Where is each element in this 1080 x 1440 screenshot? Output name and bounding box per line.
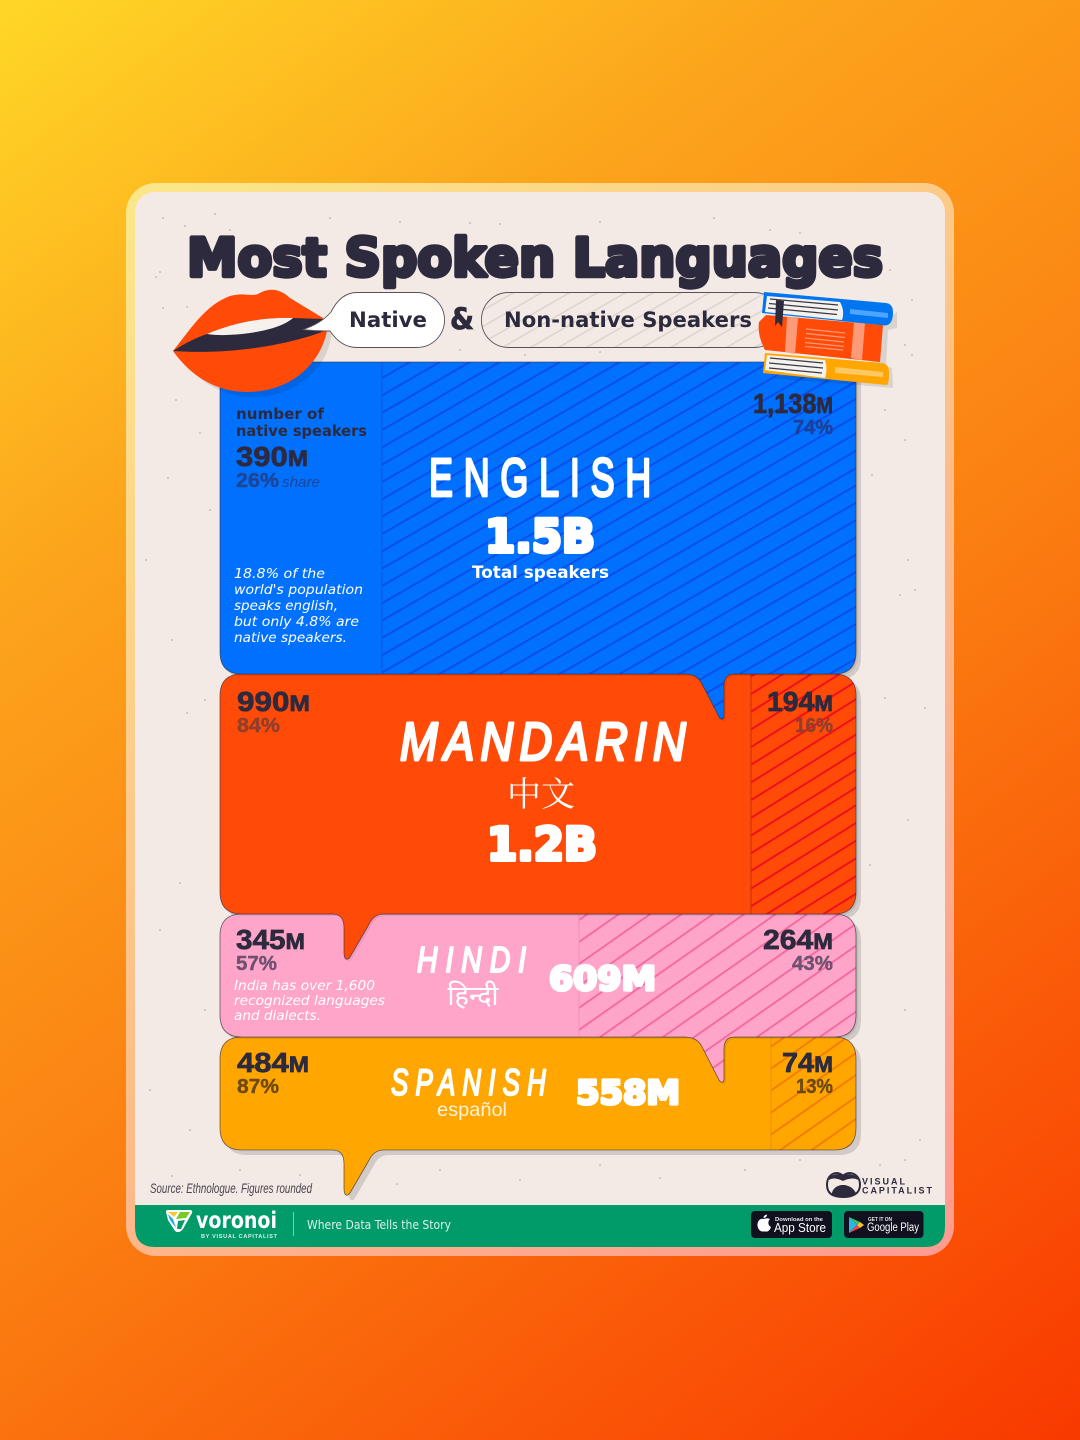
language name: ENGLISH (429, 448, 662, 508)
native speakers value: 390M (236, 441, 308, 472)
native speakers value: 345M (236, 924, 305, 955)
legend: non-native pill (482, 292, 782, 348)
legend: native pill: Native (349, 308, 427, 332)
note: world population: but only 4.8% are (234, 614, 359, 630)
wordmark: voronoi (196, 1208, 277, 1234)
title: Most Spoken Languages (187, 228, 883, 289)
tagline: BY VISUAL CAPITALIST (201, 1234, 278, 1240)
total speakers: 1.2B (487, 818, 597, 871)
footer slogan: Where Data Tells the Story (307, 1218, 451, 1232)
icon: lips (173, 290, 332, 397)
orange book (759, 315, 883, 362)
note: world population: world's population (234, 582, 363, 598)
note: world population (234, 566, 363, 646)
legend note: number of native speakers: number of (236, 405, 324, 423)
native share (236, 470, 320, 492)
card frame (126, 183, 954, 1256)
card panel (135, 192, 945, 1247)
legend note: number of native speakers (236, 405, 367, 440)
non-native value: 194M (767, 686, 833, 717)
native name: 中文 (507, 767, 575, 816)
badge: app store (751, 1211, 832, 1238)
native share: 26% (236, 470, 279, 492)
non-native share: 74% (793, 417, 833, 439)
language name: HINDI (417, 939, 534, 980)
native name: हिन्दी (447, 981, 500, 1011)
note: world population: 18.8% of the (234, 566, 325, 582)
note: india: and dialects. (234, 1008, 321, 1024)
icon: play triangle (849, 1217, 864, 1233)
non-native value: 1,138M (753, 388, 833, 419)
legend: ampersand: & (450, 302, 474, 336)
panel: mandarin (220, 674, 858, 961)
non-native value: 74M (782, 1047, 833, 1078)
native share: 84% (237, 715, 280, 737)
badge: app store: Download on the (775, 1217, 823, 1223)
non-native share: 13% (796, 1076, 833, 1098)
total speakers: 1.5B (485, 510, 595, 563)
icon: stack of books (759, 292, 897, 388)
panel: hindi (220, 914, 858, 1084)
total speakers: 609M (549, 959, 656, 998)
blue book (762, 292, 893, 326)
logo: visual capitalist: CAPITALIST (862, 1186, 932, 1196)
logo: visual capitalist (827, 1173, 932, 1197)
bookmark (775, 300, 784, 327)
native share: 57% (236, 953, 277, 975)
panel: english (220, 362, 858, 722)
logo: visual capitalist: VISUAL (862, 1176, 906, 1186)
badge: google play: Google Play (867, 1222, 919, 1234)
badge: app store: App Store (774, 1221, 826, 1235)
note: india: India has over 1,600 (234, 978, 375, 994)
total speakers label: Total speakers (472, 563, 609, 582)
icon: voronoi mark (166, 1210, 192, 1232)
logo: voronoi (166, 1208, 278, 1240)
note: world population: speaks english, (234, 598, 338, 614)
source note: Source: Ethnologue. Figures rounded (150, 1181, 312, 1196)
non-native value: 264M (763, 924, 833, 955)
native name: español (437, 1100, 507, 1121)
language name: SPANISH (391, 1062, 553, 1103)
non-native share: 16% (795, 715, 833, 737)
native speakers value: 990 M (237, 686, 310, 717)
native share: share (282, 474, 320, 491)
native speakers value: 484M (237, 1047, 309, 1078)
legend note: number of native speakers: native speakers (236, 422, 367, 440)
legend: native pill (303, 292, 444, 348)
native share: 87% (237, 1076, 279, 1098)
total speakers: 558M (576, 1073, 680, 1112)
non-native share: 43% (792, 953, 833, 975)
note: world population: native speakers. (234, 630, 347, 646)
yellow book (763, 353, 889, 385)
language name: MANDARIN (400, 712, 692, 772)
icon: apple (757, 1214, 771, 1232)
badge: google play (844, 1211, 924, 1238)
footer bar (135, 1205, 945, 1247)
legend: non-native pill: Non-native Speakers (504, 308, 752, 332)
panel: spanish (220, 1037, 856, 1195)
note: india (234, 978, 385, 1024)
note: india: recognized languages (234, 993, 385, 1009)
badge: google play: GET IT ON (868, 1217, 892, 1223)
